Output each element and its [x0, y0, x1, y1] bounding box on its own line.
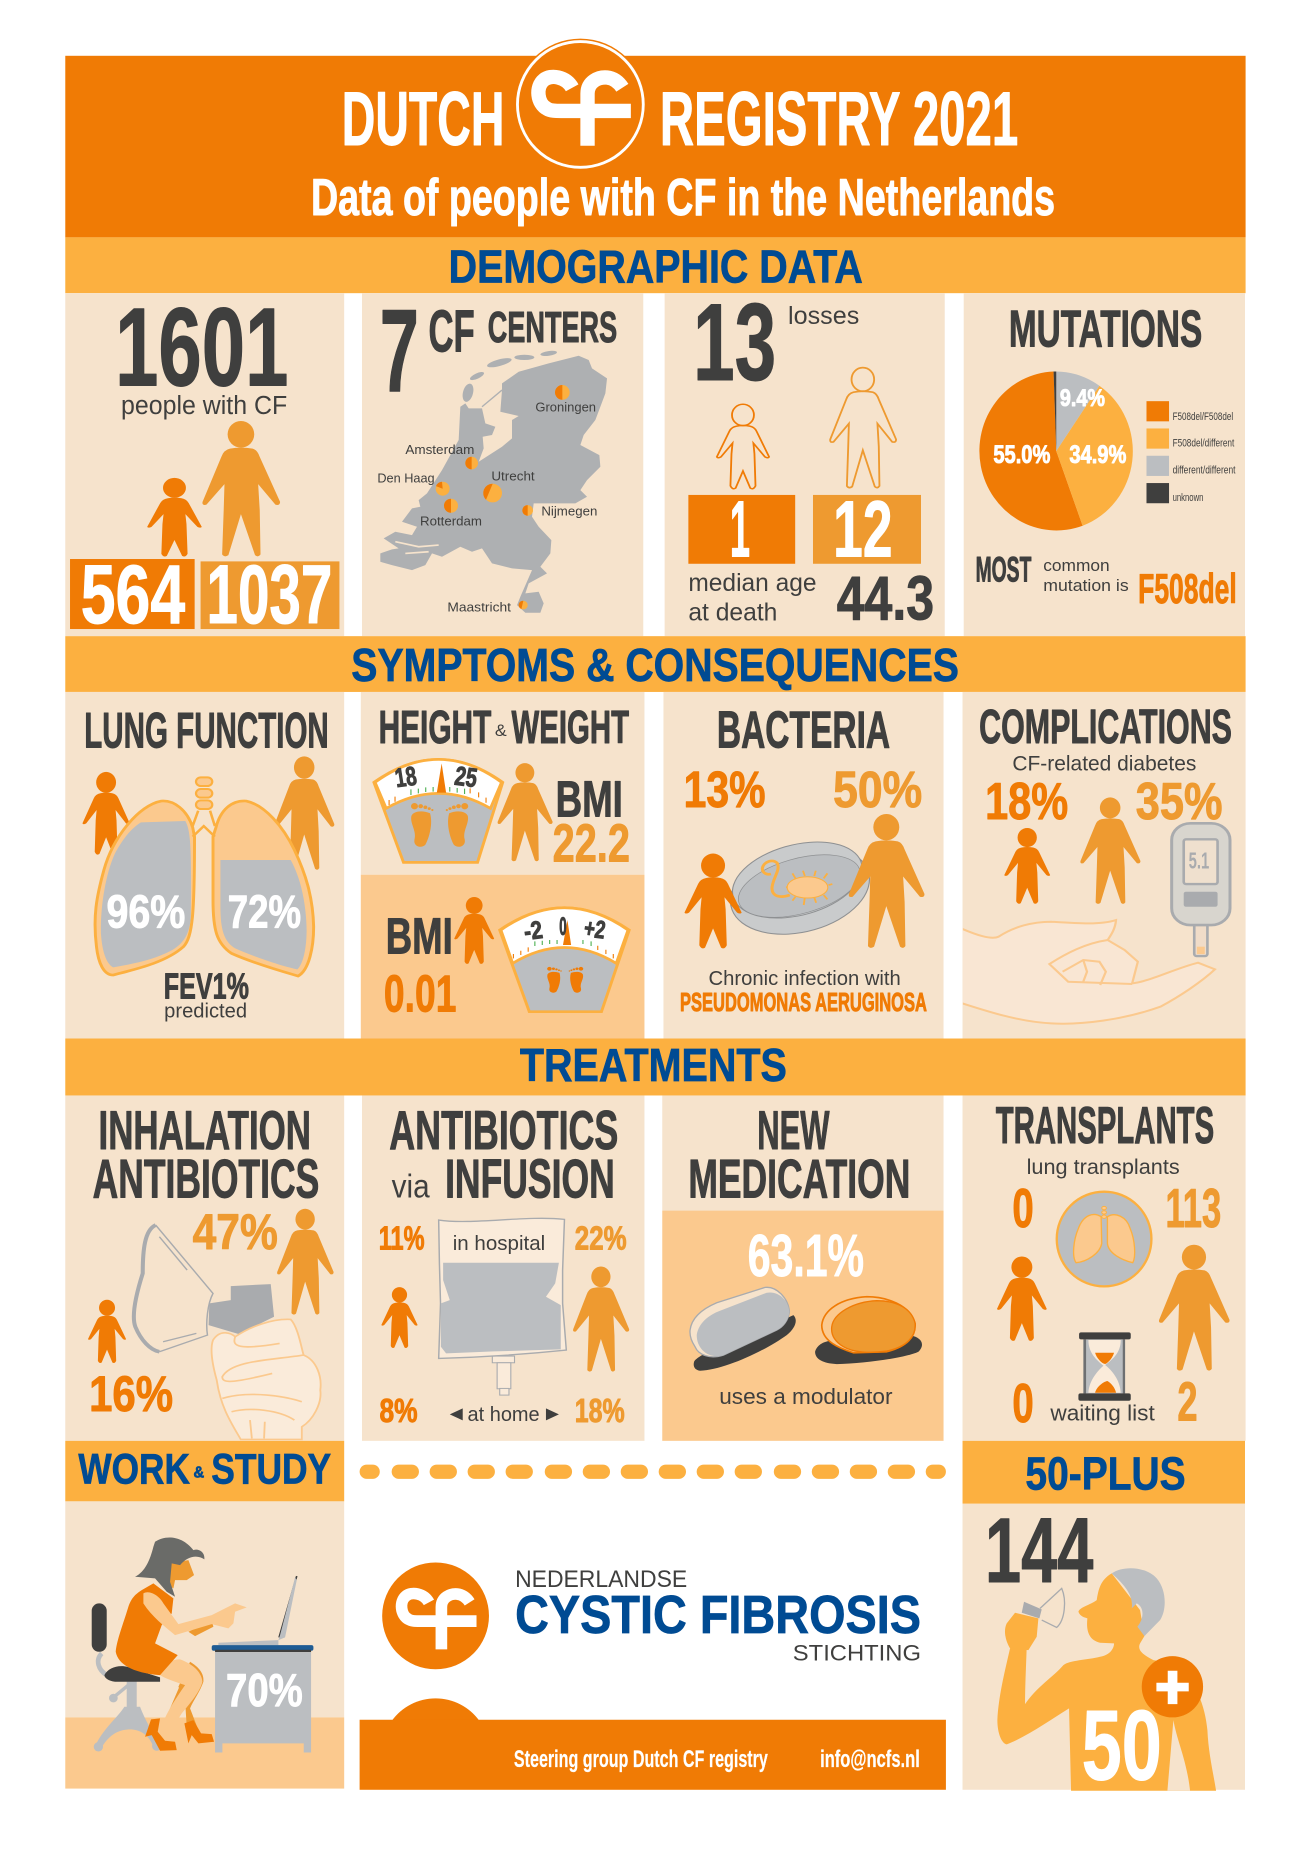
child scale and BMI: 0.01 — [384, 965, 456, 1023]
count 13: 13 — [693, 282, 776, 404]
heading work and study: WORK — [78, 1446, 190, 1494]
heading inhalation antibiotics: ANTIBIOTICS — [93, 1149, 319, 1210]
pie chart: 9.4% — [1060, 386, 1105, 412]
mask, hand, figures — [88, 1205, 334, 1439]
map of the Netherlands: Utrecht — [491, 469, 535, 484]
logo: CF emblem in header — [514, 39, 646, 170]
adult percentage: 50% — [833, 761, 922, 818]
footer bar — [360, 1698, 946, 1790]
count 1601: 1601 — [115, 285, 288, 410]
panel: people with CF — [65, 285, 344, 641]
label waiting list: waiting list — [1049, 1401, 1155, 1426]
icon: adult — [1159, 1245, 1230, 1371]
icon: adult outline — [830, 368, 896, 488]
lungs chart: FEV1% — [164, 966, 249, 1007]
child count box: 564 — [81, 548, 185, 641]
panel: height and weight — [361, 692, 644, 1039]
label median age: median age — [688, 569, 817, 597]
heading antibiotics via infusion: via — [392, 1169, 430, 1206]
adult count box: 1037 — [207, 548, 332, 641]
pie chart: 55.0% — [993, 441, 1050, 469]
panel: lung function — [65, 692, 344, 1039]
panel: CF centers — [362, 286, 643, 636]
caption: PSEUDOMONAS AERUGINOSA — [680, 987, 927, 1017]
logo wordmark — [515, 1567, 921, 1665]
pie legend: F508del/different — [1173, 437, 1234, 449]
label uses a modulator: uses a modulator — [719, 1384, 893, 1409]
infusion bag with figures: in hospital — [453, 1231, 545, 1255]
label diabetes: CF-related diabetes — [1012, 751, 1196, 775]
value child waiting list: 0 — [1012, 1373, 1034, 1434]
man with inhaler illustration — [985, 1500, 1216, 1801]
caption: Chronic infection with — [709, 967, 901, 990]
heading lung function: LUNG FUNCTION — [84, 703, 329, 759]
label median age — [688, 569, 817, 627]
value adult waiting list: 2 — [1177, 1372, 1198, 1433]
adult scale and BMI: 22.2 — [553, 813, 630, 873]
heading 7 CF centers: CF — [428, 297, 475, 364]
adult scale and BMI: BMI — [556, 772, 623, 828]
heading height and weight: WEIGHT — [512, 701, 629, 753]
most common mutation: F508del — [1138, 565, 1237, 612]
value adult lung transplants: 113 — [1165, 1178, 1221, 1239]
heading 50-plus — [963, 1441, 1245, 1504]
most common mutation: MOST — [976, 550, 1032, 590]
infusion bag with figures: 22% — [575, 1220, 627, 1257]
section band: demographic data — [65, 237, 1246, 293]
map of the Netherlands: Maastricht — [447, 600, 511, 615]
logo wordmark: NEDERLANDSE — [515, 1567, 687, 1593]
lungs chart: 96% — [106, 887, 185, 938]
section band: symptoms and consequences — [65, 636, 1246, 692]
panel: losses — [665, 282, 945, 636]
map of the Netherlands: Groningen — [535, 400, 596, 415]
logo: Nederlandse Cystic Fibrosis Stichting — [382, 1562, 921, 1669]
heading work and study: STUDY — [211, 1446, 331, 1494]
logo wordmark: CYSTIC FIBROSIS — [515, 1586, 921, 1645]
most common mutation: common — [1043, 556, 1110, 575]
heading antibiotics via infusion — [389, 1100, 618, 1210]
map of the Netherlands: Den Haag — [377, 471, 435, 486]
woman at desk illustration: 70% — [226, 1664, 303, 1716]
heading antibiotics via infusion: ANTIBIOTICS — [389, 1100, 618, 1161]
child percentage: 18% — [985, 773, 1068, 831]
section band: symptoms and consequences: SYMPTOMS & CONSEQUENCES — [351, 639, 959, 691]
child scale and BMI: +2 — [582, 914, 607, 944]
title: REGISTRY 2021 — [660, 77, 1018, 162]
heading work and study: & — [193, 1465, 204, 1482]
value 44.3: 44.3 — [837, 565, 934, 634]
heading height and weight: & — [495, 721, 507, 740]
pie chart: 34.9% — [1069, 441, 1126, 469]
child losses box — [688, 485, 795, 574]
value child lung transplants: 0 — [1012, 1178, 1034, 1239]
icon: adult — [202, 421, 280, 556]
section band: treatments: TREATMENTS — [520, 1039, 787, 1091]
man with inhaler illustration: 144 — [985, 1500, 1093, 1602]
value 63.1 percent: 63.1% — [748, 1222, 864, 1289]
map of the Netherlands: Amsterdam — [405, 442, 474, 457]
panel: transplants — [963, 1095, 1246, 1441]
logo emblem — [382, 1562, 489, 1669]
figures, hand and glucose meter — [957, 797, 1230, 1024]
adult scale and BMI: 18 — [393, 760, 419, 793]
child losses box: 1 — [730, 485, 750, 574]
pie legend: F508del/F508del — [1173, 411, 1233, 423]
map of the Netherlands: Nijmegen — [541, 504, 597, 519]
mask, hand, figures: 16% — [89, 1366, 173, 1422]
title — [342, 77, 1018, 162]
panel: work and study — [65, 1441, 344, 1789]
child scale and BMI: -2 — [522, 915, 544, 946]
child scale and BMI — [384, 897, 629, 1023]
panel: 50-plus — [963, 1441, 1245, 1801]
child percentage: 13% — [684, 761, 766, 818]
child scale and BMI: 0 — [559, 912, 567, 941]
adult scale and BMI: 25 — [453, 760, 479, 793]
most common mutation: mutation is — [1043, 576, 1129, 595]
infusion bag with figures: 11% — [379, 1220, 425, 1257]
icon: child outline — [717, 404, 769, 489]
heading 7 CF centers: CENTERS — [488, 303, 617, 352]
heading new medication: MEDICATION — [688, 1149, 910, 1210]
infusion bag with figures: at home — [468, 1402, 540, 1425]
label lung transplants: lung transplants — [1027, 1155, 1180, 1179]
title: DUTCH — [342, 77, 504, 162]
heading 7 CF centers — [380, 286, 617, 417]
infusion bag with figures: 18% — [575, 1392, 625, 1429]
heading inhalation antibiotics — [93, 1100, 319, 1210]
heading new medication: NEW — [757, 1100, 830, 1161]
dotted divider — [360, 1465, 946, 1479]
adult count box — [201, 548, 339, 641]
label losses: losses — [788, 302, 859, 330]
panel: new medication — [662, 1095, 944, 1441]
heading height and weight: HEIGHT — [379, 701, 491, 753]
panel: bacteria — [663, 692, 944, 1039]
panel: antibiotics via infusion — [362, 1095, 644, 1441]
heading 50-plus: 50-PLUS — [1025, 1448, 1186, 1500]
pie chart — [979, 371, 1133, 530]
icon: child — [997, 1256, 1047, 1341]
heading antibiotics via infusion: INFUSION — [445, 1149, 615, 1210]
lungs chart: 72% — [228, 887, 301, 938]
lungs chart: predicted — [164, 998, 247, 1022]
adult percentage: 35% — [1136, 773, 1222, 831]
section band: treatments — [65, 1039, 1246, 1095]
man with inhaler illustration: 50 — [1082, 1690, 1162, 1801]
pie legend: unknown — [1173, 492, 1203, 504]
heading 7 CF centers: 7 — [380, 286, 419, 417]
icon: child — [147, 478, 202, 557]
pie legend: different/different — [1173, 465, 1236, 477]
adult losses box: 12 — [833, 485, 893, 574]
mask, hand, figures: 47% — [193, 1205, 278, 1260]
adult scale and BMI — [374, 759, 630, 873]
label people with CF: people with CF — [121, 390, 287, 420]
petri dish with figures — [684, 814, 924, 949]
footer text: email: info@ncfs.nl — [820, 1747, 920, 1773]
footer text: steering group: Steering group Dutch CF registry — [514, 1747, 768, 1773]
logo wordmark: STICHTING — [793, 1640, 921, 1665]
icon: orange pill — [815, 1297, 922, 1364]
most common mutation — [976, 550, 1237, 612]
heading height and weight — [379, 701, 629, 753]
child scale and BMI: BMI — [386, 909, 453, 965]
caption — [680, 967, 927, 1017]
infusion bag with figures — [379, 1218, 629, 1429]
map of the Netherlands: Rotterdam — [420, 514, 482, 529]
pie legend — [1146, 401, 1236, 504]
lungs chart — [82, 756, 334, 1022]
infusion bag with figures: 8% — [379, 1392, 418, 1429]
panel: complications — [957, 692, 1246, 1039]
section band: demographic data: DEMOGRAPHIC DATA — [449, 240, 863, 292]
header banner — [65, 39, 1246, 237]
icon: lungs in circle — [1057, 1192, 1151, 1286]
panel: inhalation antibiotics — [65, 1095, 344, 1441]
woman at desk illustration — [92, 1537, 313, 1752]
heading new medication — [688, 1100, 910, 1210]
heading work and study — [65, 1441, 344, 1501]
icon: hourglass — [1078, 1332, 1131, 1401]
panel: mutations — [964, 293, 1245, 636]
heading inhalation antibiotics: INHALATION — [99, 1100, 311, 1161]
map of the Netherlands — [377, 350, 607, 615]
label median age: at death — [688, 599, 777, 627]
heading bacteria: BACTERIA — [717, 702, 890, 760]
figures, hand and glucose meter: 5.1 — [1189, 848, 1209, 874]
icon: grey pill — [690, 1287, 796, 1371]
